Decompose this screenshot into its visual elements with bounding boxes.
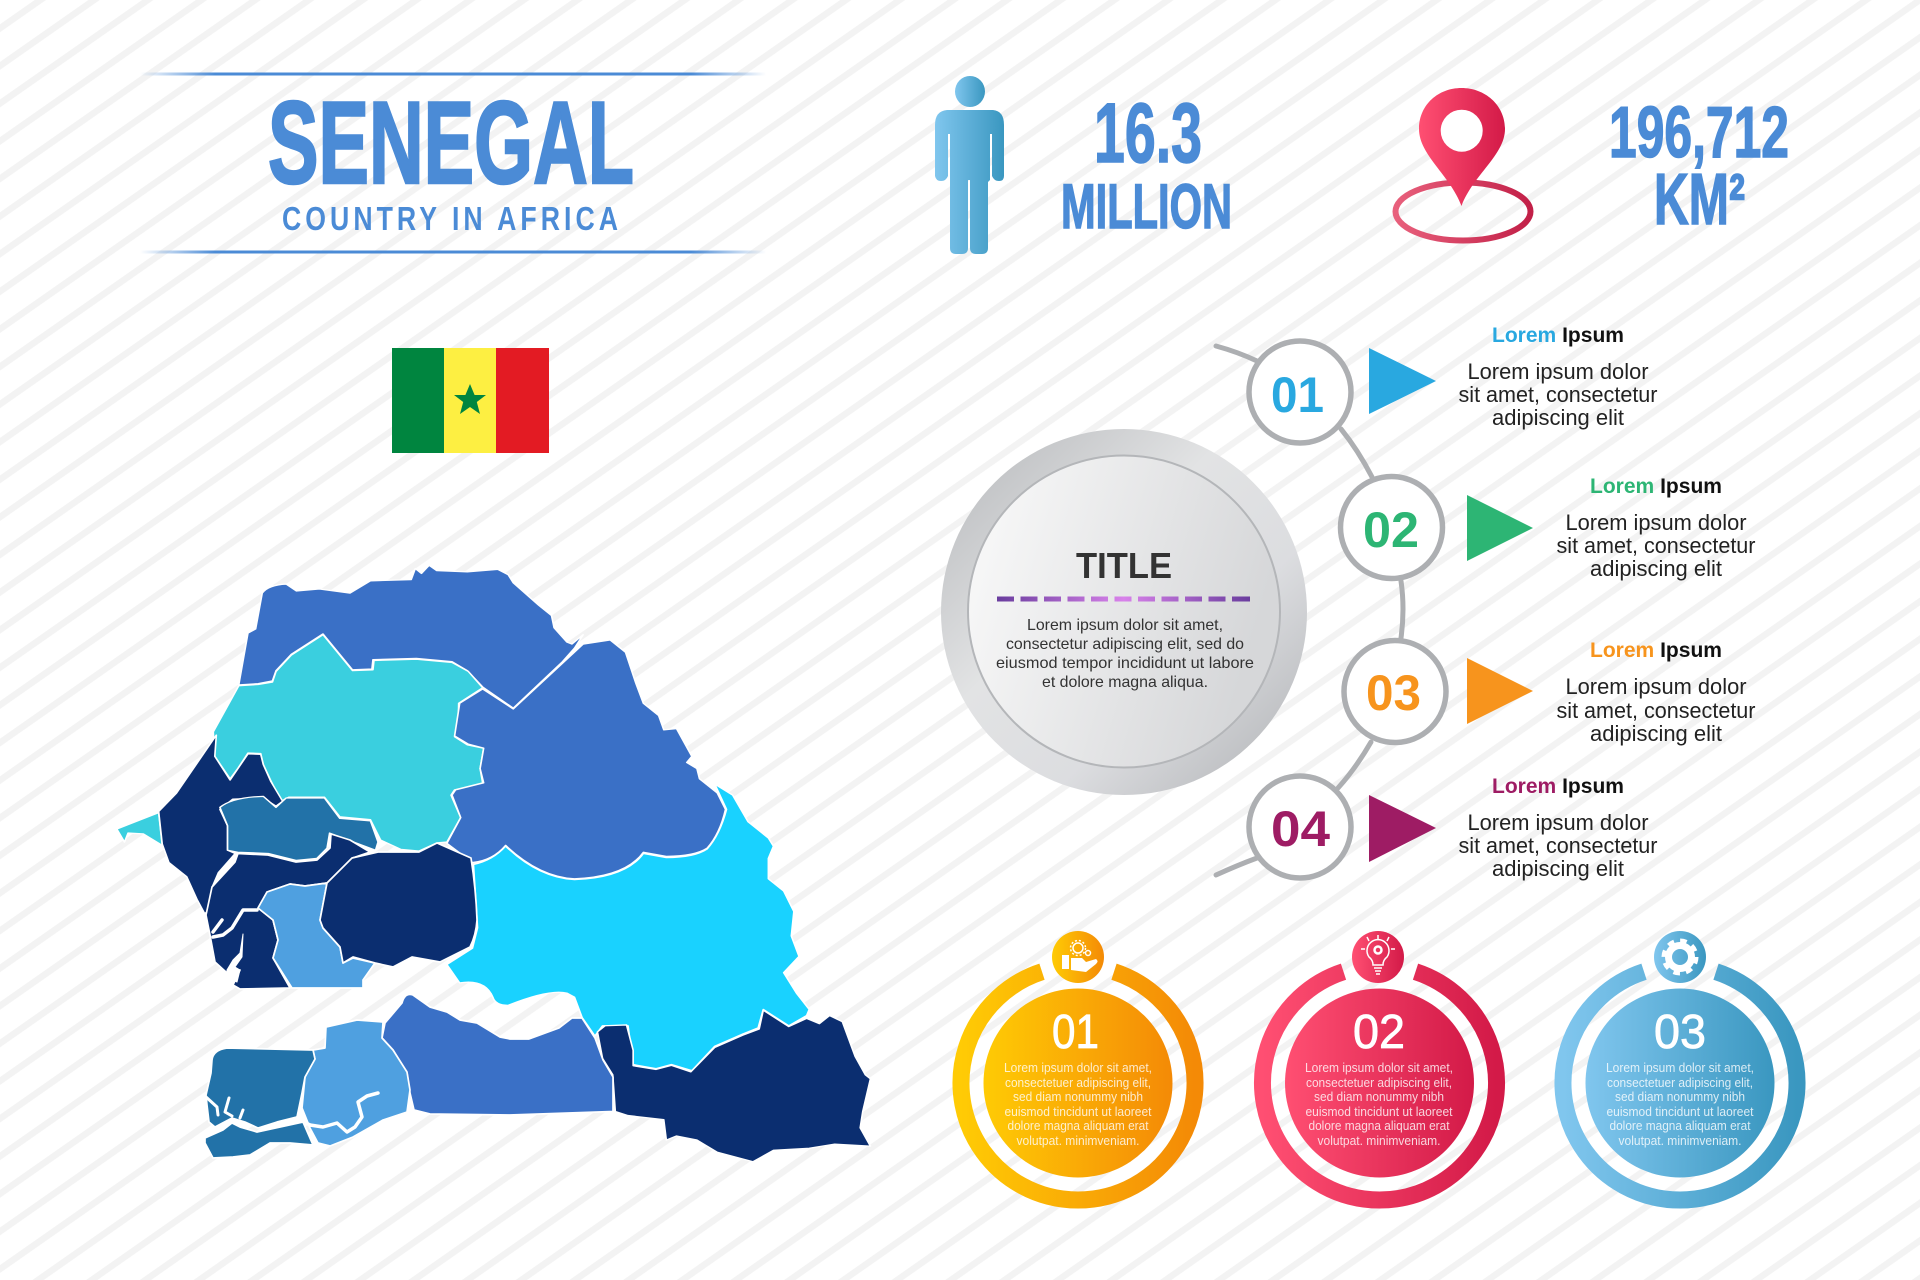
region: Kaffrine xyxy=(320,843,477,967)
card 03: blue: 03 xyxy=(1654,1006,1706,1059)
region: Dakar xyxy=(117,813,162,845)
item 04: adipiscing elit xyxy=(1492,856,1624,881)
card text: consectetuer adipiscing elit, xyxy=(1005,1076,1151,1090)
icon: hand with gears xyxy=(1052,931,1104,983)
body text: Lorem ipsum dolor sit amet, xyxy=(1027,617,1223,634)
region: Tambacounda xyxy=(447,784,809,1071)
icon: gear xyxy=(1654,931,1706,983)
card text xyxy=(1606,1061,1754,1148)
item 03: Lorem ipsum dolor xyxy=(1566,674,1746,699)
region: Thies xyxy=(159,735,283,914)
item 01: sit amet, consectetur xyxy=(1458,382,1658,407)
item 02: 02 xyxy=(1363,502,1419,558)
item 04: Lorem ipsum dolor xyxy=(1468,810,1648,835)
body text: consectetur adipiscing elit, sed do xyxy=(1006,636,1244,653)
region: Saint-Louis xyxy=(239,565,583,708)
card text: Lorem ipsum dolor sit amet, xyxy=(1305,1061,1453,1075)
region: Fatick and Saloum delta xyxy=(206,834,370,989)
title: Senegal: SENEGAL xyxy=(268,77,634,208)
card text: volutpat. minimveniam. xyxy=(1618,1134,1742,1148)
card text: sed diam nonummy nibh xyxy=(1013,1090,1143,1104)
item 03: sit amet, consectetur xyxy=(1556,698,1756,723)
card text: volutpat. minimveniam. xyxy=(1016,1134,1140,1148)
item 02: Lorem Ipsum xyxy=(1590,475,1722,498)
card 02: red xyxy=(1263,931,1497,1200)
item 03: Lorem Ipsum xyxy=(1590,639,1722,662)
body text: et dolore magna aliqua. xyxy=(1042,674,1208,691)
population stat: MILLION xyxy=(1061,172,1232,242)
card text xyxy=(1004,1061,1152,1148)
region: Matam xyxy=(447,640,726,879)
card text: consectetuer adipiscing elit, xyxy=(1306,1076,1452,1090)
connector lines xyxy=(1216,346,1403,875)
item 01: 01 xyxy=(1271,367,1324,423)
body text xyxy=(996,617,1254,691)
card text: sed diam nonummy nibh xyxy=(1615,1090,1745,1104)
card 02: red: 02 xyxy=(1353,1006,1405,1059)
heading: TITLE: TITLE xyxy=(1076,545,1172,586)
card 01: yellow xyxy=(961,931,1195,1200)
icon: lightbulb with gear xyxy=(1352,931,1404,983)
icon: map pin xyxy=(1396,88,1530,240)
card 01: yellow: 01 xyxy=(1052,1006,1099,1059)
card text: consectetuer adipiscing elit, xyxy=(1607,1076,1753,1090)
item 04: Lorem Ipsum xyxy=(1492,775,1624,798)
card text: euismod tincidunt ut laoreet xyxy=(1004,1105,1152,1119)
item 02 xyxy=(1340,475,1756,581)
item 04 xyxy=(1249,775,1658,881)
item 02: sit amet, consectetur xyxy=(1556,533,1756,558)
region: Louga xyxy=(213,635,484,851)
card text xyxy=(1305,1061,1453,1148)
item 04: sit amet, consectetur xyxy=(1458,833,1658,858)
card text: Lorem ipsum dolor sit amet, xyxy=(1606,1061,1754,1075)
region: Ziguinchor north xyxy=(206,1048,315,1128)
icon: flag of Senegal xyxy=(392,348,549,453)
card text: dolore magna aliquam erat xyxy=(1308,1119,1450,1133)
area stat: KM² xyxy=(1654,160,1745,240)
card text: volutpat. minimveniam. xyxy=(1318,1134,1440,1148)
region: Sedhiou xyxy=(302,1020,410,1146)
item 01: Lorem Ipsum xyxy=(1492,324,1624,347)
item 01 xyxy=(1249,324,1658,443)
title block xyxy=(140,72,766,254)
population stat xyxy=(1061,86,1232,242)
item 03: 03 xyxy=(1366,665,1421,721)
item 02: adipiscing elit xyxy=(1590,556,1722,581)
item 01: adipiscing elit xyxy=(1492,405,1624,430)
dashed divider xyxy=(997,596,1250,602)
card text: euismod tincidunt ut laoreet xyxy=(1306,1105,1453,1119)
central title circle xyxy=(941,429,1307,795)
body text: eiusmod tempor incididunt ut labore xyxy=(996,655,1254,672)
region: Diourbel xyxy=(220,796,378,860)
population stat: 16.3 xyxy=(1094,86,1202,180)
card 03: blue xyxy=(1563,931,1797,1200)
item 01: Lorem ipsum dolor xyxy=(1468,359,1648,384)
card text: sed diam nonummy nibh xyxy=(1314,1090,1444,1104)
radial list diagram xyxy=(941,324,1756,881)
map of Senegal xyxy=(117,565,870,1162)
card text: dolore magna aliquam erat xyxy=(1008,1119,1149,1133)
card text: euismod tincidunt ut laoreet xyxy=(1606,1105,1754,1119)
region: Kedougou xyxy=(597,1010,870,1162)
item 02: Lorem ipsum dolor xyxy=(1566,510,1746,535)
region: Ziguinchor south xyxy=(205,1122,313,1158)
item 03 xyxy=(1344,639,1756,746)
subtitle: COUNTRY IN AFRICA xyxy=(282,200,622,237)
area stat xyxy=(1609,93,1789,240)
area stat: 196,712 xyxy=(1609,93,1789,173)
icon: person xyxy=(935,76,1004,254)
item 04: 04 xyxy=(1271,801,1330,857)
card text: dolore magna aliquam erat xyxy=(1610,1119,1751,1133)
region: Kolda xyxy=(382,994,613,1115)
northern and eastern regions xyxy=(117,565,870,1162)
region: Kaolack xyxy=(258,883,375,988)
item 03: adipiscing elit xyxy=(1590,721,1722,746)
card text: Lorem ipsum dolor sit amet, xyxy=(1004,1061,1152,1075)
central and southern regions xyxy=(205,834,613,1158)
rivers and inlets xyxy=(206,910,378,1132)
